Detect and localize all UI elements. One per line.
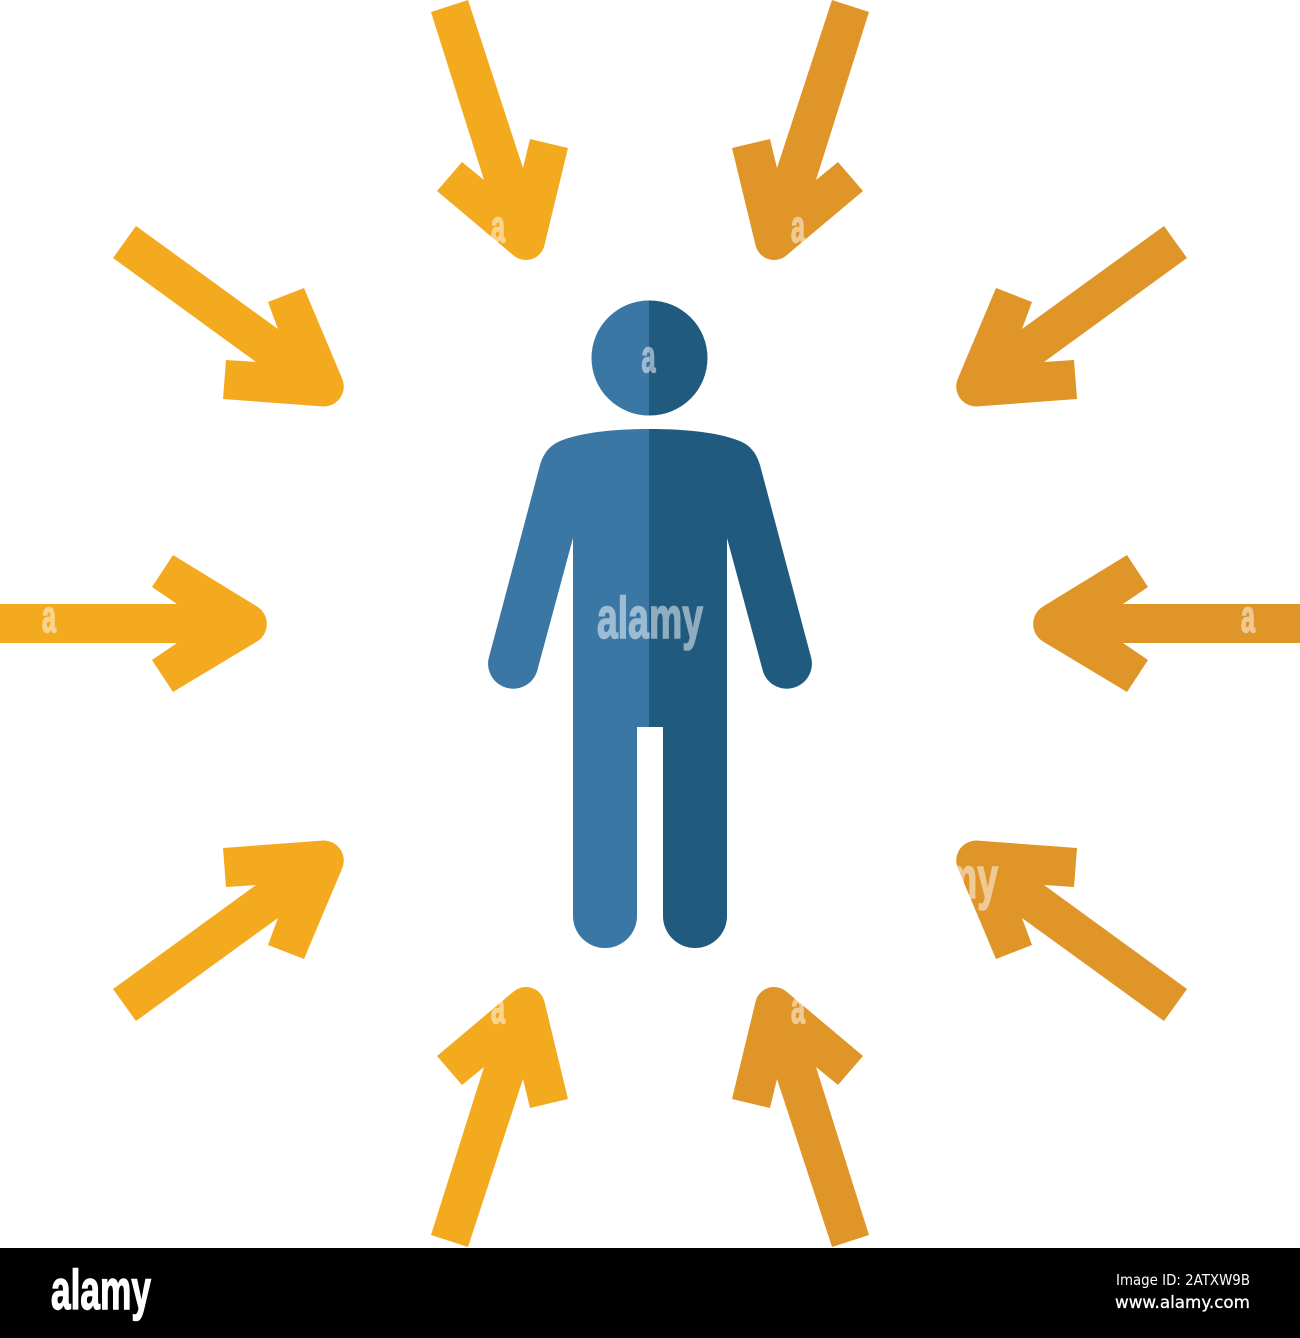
arrow: lower left, pointing up-right xyxy=(113,841,344,1021)
arrow: upper left, pointing down-right xyxy=(113,226,344,406)
footer bar xyxy=(0,1248,1300,1338)
watermarks xyxy=(42,201,1256,1033)
arrow: bottom right, pointing up xyxy=(732,987,869,1247)
arrow: top left, pointing down xyxy=(431,0,568,260)
watermark: center: alamy xyxy=(597,586,703,651)
arrow: right, pointing left xyxy=(1033,555,1300,692)
footer logo: alamy xyxy=(51,1258,151,1321)
icon: person figure xyxy=(488,300,812,948)
arrow: left, pointing right xyxy=(0,555,267,692)
watermark: top left arrow: a xyxy=(491,201,506,252)
watermark: top right arrow: a xyxy=(791,201,806,252)
watermark: right arrow: a xyxy=(1241,591,1256,642)
watermark: bottom right arrow: a xyxy=(791,982,806,1033)
arrow: lower right, pointing up-left xyxy=(956,841,1187,1021)
footer image id: Image ID: 2ATXW9B xyxy=(1116,1271,1250,1289)
watermark: lower right arrow: alamy xyxy=(892,846,998,911)
watermark: head: a xyxy=(642,331,656,382)
watermark: left arrow: a xyxy=(42,591,57,642)
footer url: www.alamy.com xyxy=(1115,1293,1250,1313)
arrow: bottom left, pointing up xyxy=(431,987,568,1247)
watermark: bottom left arrow: a xyxy=(491,982,506,1033)
arrow: upper right, pointing down-left xyxy=(956,226,1187,406)
arrow: top right, pointing down xyxy=(732,0,869,260)
person head xyxy=(591,300,708,416)
person body xyxy=(488,429,812,948)
